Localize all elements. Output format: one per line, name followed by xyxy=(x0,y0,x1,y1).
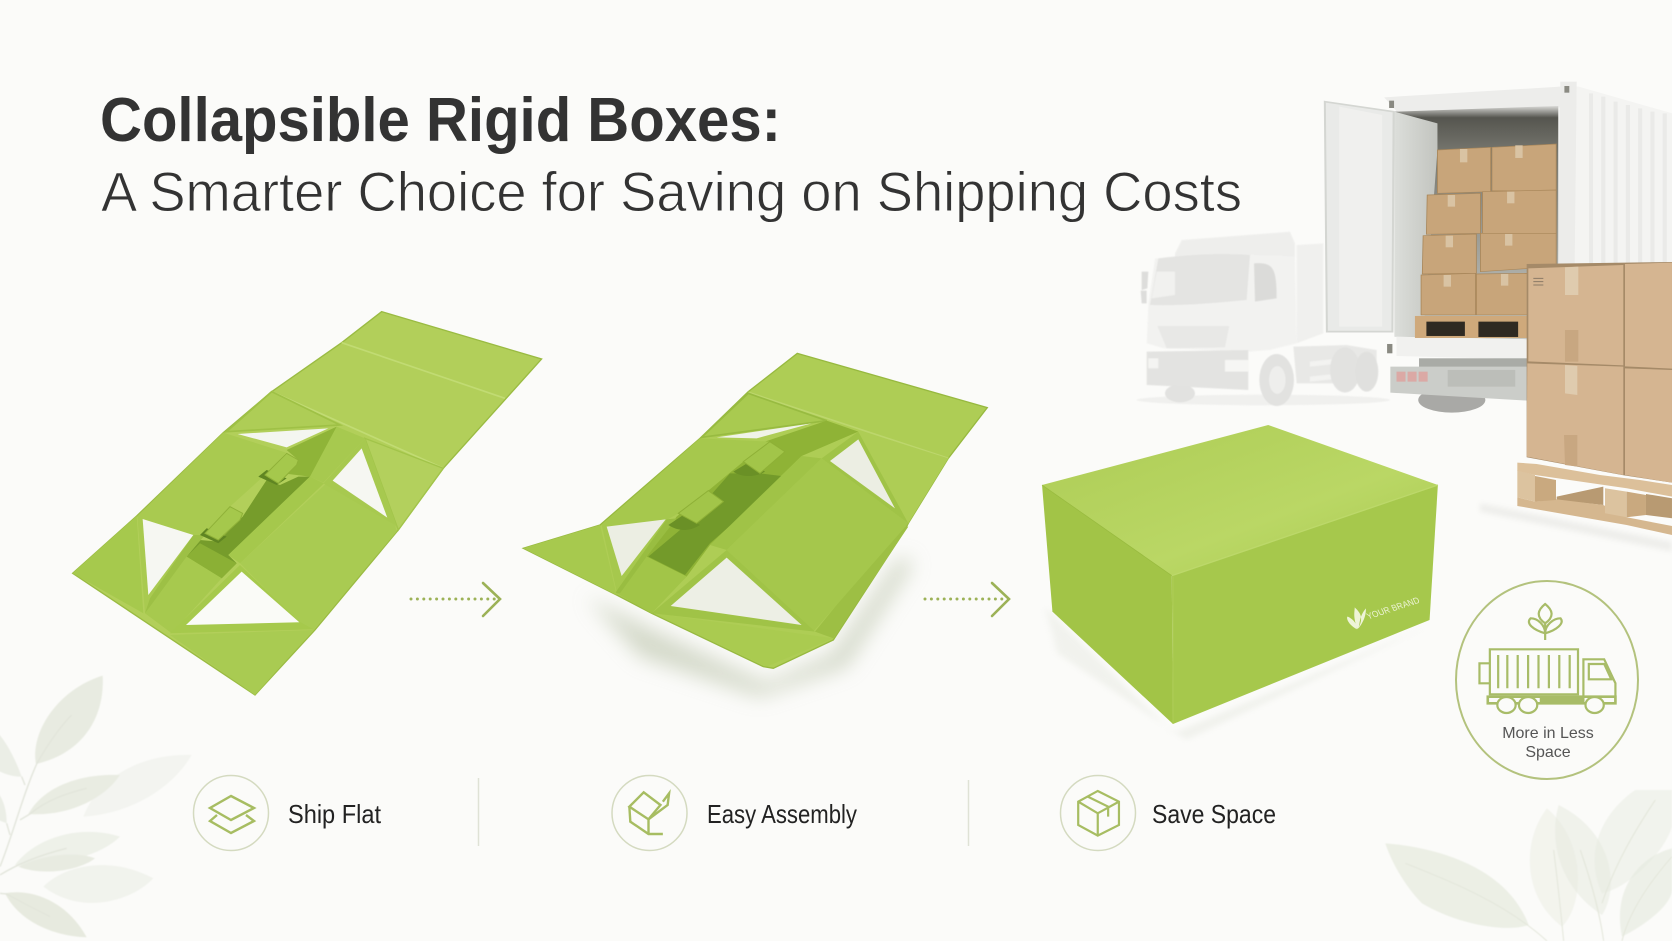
white triangle left xyxy=(143,519,193,595)
white triangle left xyxy=(607,519,666,576)
white triangle top xyxy=(238,428,328,447)
feature: Save Space xyxy=(1060,776,1276,850)
step 3: assembled box xyxy=(1042,425,1438,740)
white triangle right xyxy=(333,448,387,518)
open shipping container with boxes xyxy=(1325,82,1672,413)
tabs xyxy=(743,442,785,473)
crease xyxy=(748,392,948,458)
white sliver xyxy=(717,423,812,438)
top face xyxy=(1042,425,1438,576)
leaves: bottom-right decoration xyxy=(1385,790,1672,941)
tabs xyxy=(265,453,298,483)
front post xyxy=(1558,82,1577,270)
leaves: bottom-left decoration xyxy=(0,676,192,937)
icon circle xyxy=(194,776,268,850)
white triangle right xyxy=(830,439,895,508)
feature: Ship Flat xyxy=(194,776,382,850)
interior dark xyxy=(187,477,310,578)
lower panel xyxy=(727,458,908,632)
ground shadow xyxy=(587,557,913,697)
label: Easy Assembly xyxy=(707,799,857,829)
lower panel xyxy=(240,482,397,630)
left face xyxy=(1042,485,1173,724)
container top frame xyxy=(1384,87,1560,113)
lip xyxy=(228,477,324,563)
door xyxy=(1325,102,1394,332)
white triangle bottom xyxy=(186,572,299,625)
title line 2: A Smarter Choice for Saving on Shipping Costs xyxy=(101,160,1242,223)
container interior xyxy=(1394,106,1558,340)
lower floor xyxy=(145,557,222,633)
ground shadow xyxy=(1045,607,1427,740)
divider xyxy=(478,778,480,846)
right face xyxy=(1172,485,1438,724)
brand mark: YOUR BRAND xyxy=(1365,595,1422,621)
tab undersides xyxy=(668,462,765,530)
left corner flap xyxy=(73,516,143,613)
container side wall xyxy=(1558,87,1672,277)
interior slope xyxy=(310,427,365,483)
faded truck cab in background xyxy=(1137,232,1390,406)
wall xyxy=(602,438,770,592)
top flap xyxy=(702,393,827,437)
badge text: Space xyxy=(1525,744,1571,761)
arrow 1 xyxy=(411,583,500,616)
divider xyxy=(968,780,970,846)
icon: cube box xyxy=(1078,791,1119,836)
arrow 2 xyxy=(925,583,1009,616)
outline xyxy=(523,353,987,668)
cartons xyxy=(1527,262,1672,483)
icon: stacked sheets xyxy=(210,796,254,833)
chassis and wheels xyxy=(1390,358,1528,413)
lip xyxy=(710,456,822,550)
flat outline xyxy=(73,312,542,695)
tab undersides xyxy=(200,470,287,543)
side strip xyxy=(815,527,908,638)
title xyxy=(100,86,1242,223)
tape strips xyxy=(1565,267,1578,395)
bottom triangle xyxy=(170,630,313,695)
icon: truck with leaf xyxy=(1479,604,1615,713)
interior xyxy=(647,421,858,577)
white triangle bottom xyxy=(671,558,802,625)
brand mark xyxy=(1347,595,1422,629)
icon: unfolding box xyxy=(629,792,669,834)
container floor xyxy=(1397,337,1528,359)
pallet inside xyxy=(1415,316,1528,338)
boxes stacked inside xyxy=(1421,144,1556,315)
badge ring xyxy=(1456,581,1638,779)
step 2: half-folded box xyxy=(523,353,987,697)
floor shadow xyxy=(1480,503,1672,552)
icon circle xyxy=(1060,776,1136,850)
feature: Easy Assembly xyxy=(612,776,857,850)
top flap xyxy=(227,392,340,432)
title line 1: Collapsible Rigid Boxes: xyxy=(100,86,781,155)
label: Ship Flat xyxy=(288,799,382,829)
badge text: More in Less xyxy=(1502,725,1594,742)
label: Save Space xyxy=(1152,799,1276,829)
icon circle xyxy=(612,776,687,850)
left corner xyxy=(523,525,617,595)
pallet of cartons foreground xyxy=(1480,262,1672,552)
wooden pallet xyxy=(1517,463,1672,535)
raised wall xyxy=(137,433,286,613)
bottom flaps xyxy=(653,613,833,667)
creases xyxy=(272,343,505,468)
right triangle xyxy=(365,438,443,530)
right triangle xyxy=(858,430,948,523)
badge: More in Less Space xyxy=(1456,581,1638,779)
step 1: flat box xyxy=(73,312,542,695)
interior floor xyxy=(283,427,337,477)
